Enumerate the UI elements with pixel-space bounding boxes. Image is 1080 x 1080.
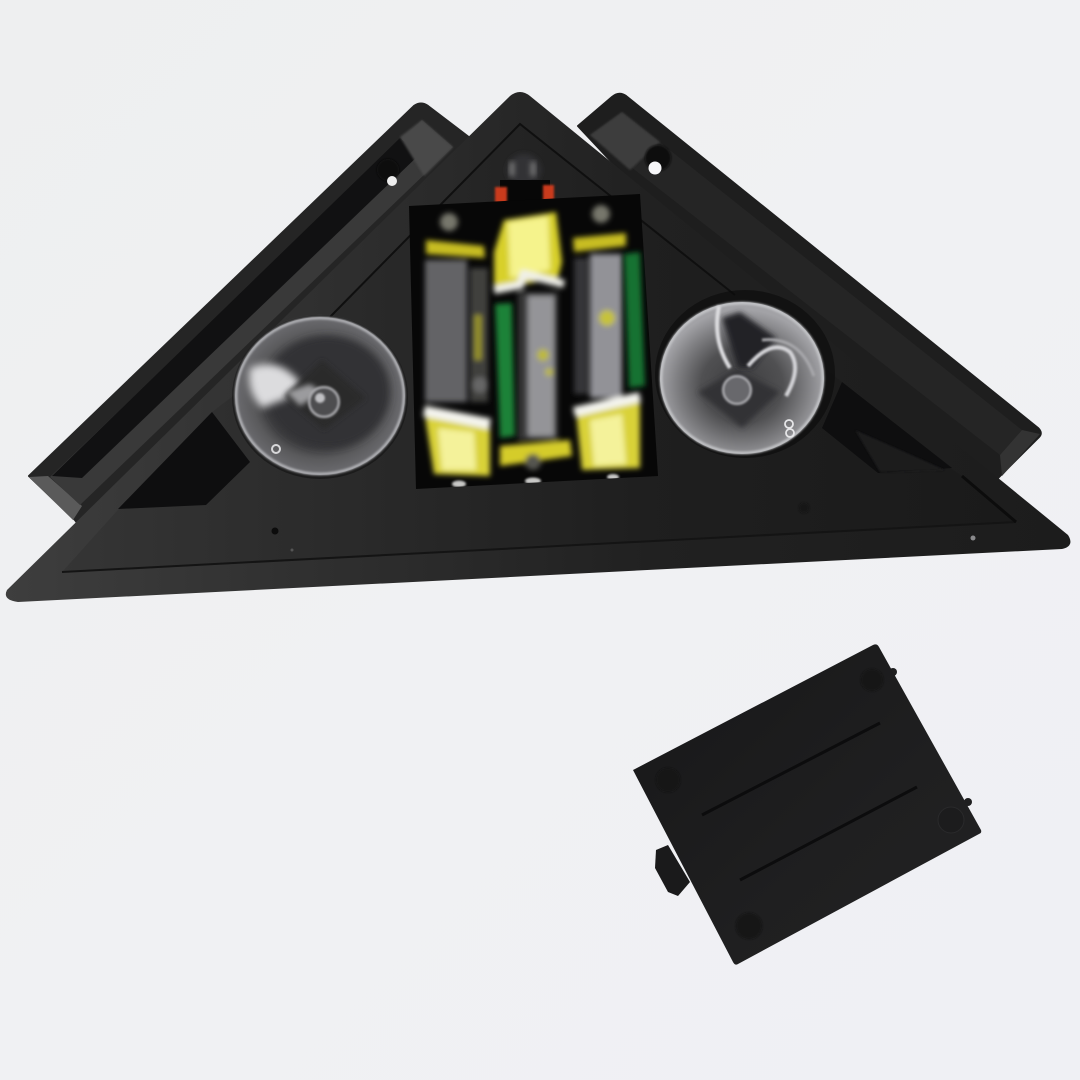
contacts [452,474,619,488]
right recess [822,382,952,473]
left battery [424,213,490,476]
green strip right [624,252,645,388]
small screw marks [272,503,976,552]
back right triangle panel [578,94,1041,478]
battery cover [633,644,981,965]
top connector [495,154,554,205]
mounting hole left [377,159,399,186]
product photo scene [6,92,1070,965]
right battery [573,205,640,470]
left recess [118,412,250,509]
mounting hole right [645,145,671,174]
middle battery [494,212,572,470]
battery compartment [409,194,658,489]
green strip middle [495,303,515,438]
back left triangle panel [29,104,470,524]
right suction cup [655,290,835,458]
left suction cup [232,315,408,479]
front triangle housing [6,92,1070,602]
